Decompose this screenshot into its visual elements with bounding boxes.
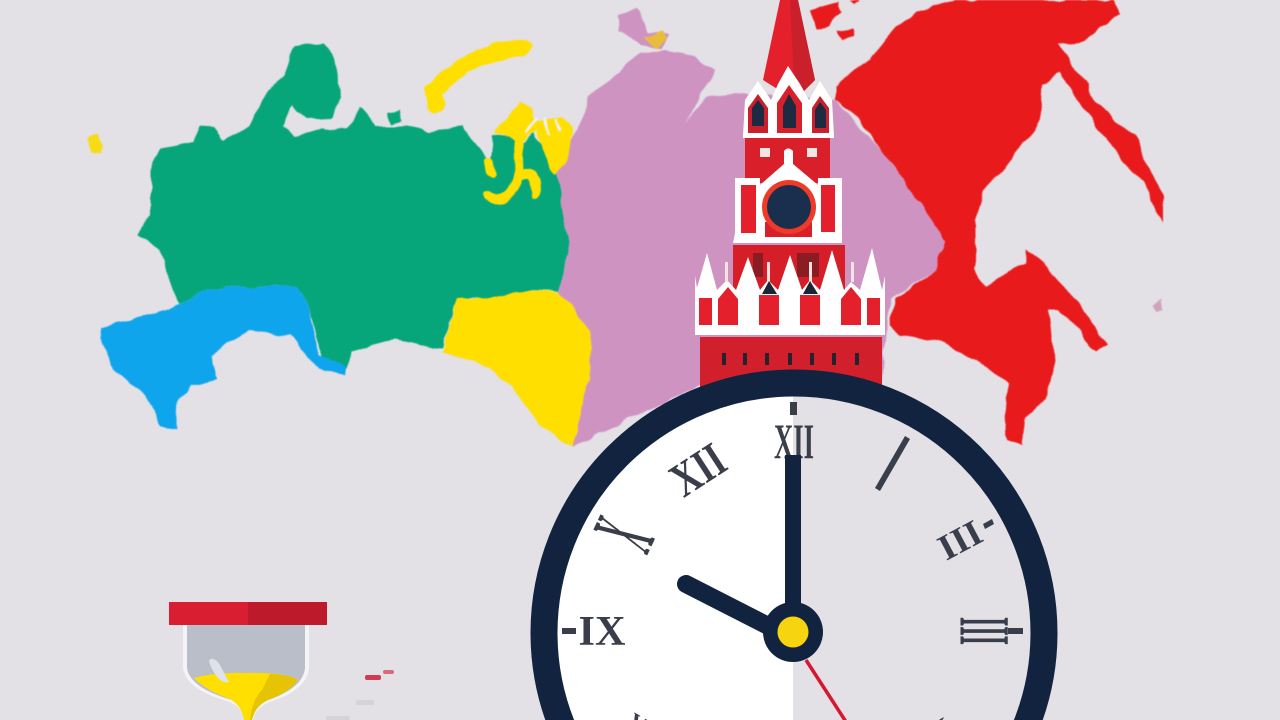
clock face base (553, 393, 1033, 720)
region: green (137, 42, 568, 375)
clock rim (544, 383, 1044, 720)
pale particle (326, 716, 350, 720)
falling particles (326, 670, 394, 720)
centre belfry opening (783, 94, 796, 128)
right panel (821, 185, 835, 232)
region: pink island (617, 9, 671, 50)
region: yellow north peninsula (495, 102, 573, 175)
map of regions (87, 0, 1162, 447)
grey particle (356, 700, 374, 705)
hour hand (686, 584, 780, 632)
region: red islands (810, 0, 860, 39)
battlement dark arches (762, 281, 818, 294)
region: far west islet (87, 135, 105, 155)
hourglass (169, 602, 327, 720)
red particle (365, 675, 381, 680)
spire shaded side (790, 0, 815, 100)
clock hub (763, 602, 823, 662)
base slits (722, 353, 859, 365)
small windows (760, 148, 817, 157)
second hand (806, 660, 850, 720)
region: yellow south (443, 290, 591, 447)
numeral ticks (562, 402, 1023, 634)
glass fill (187, 625, 305, 720)
region: green islet (388, 110, 403, 123)
belfry ledge (743, 133, 834, 138)
hourglass cap (169, 602, 327, 625)
belfry arches (743, 66, 834, 136)
upper tower body (745, 138, 830, 183)
clock face left half (553, 393, 793, 720)
region: pink (556, 50, 945, 447)
left belfry window (748, 94, 768, 133)
numeral I (875, 436, 910, 491)
kremlin tower (695, 0, 885, 387)
glass outline (183, 625, 309, 720)
clock section (733, 148, 842, 243)
sand (194, 673, 298, 720)
tower base (700, 337, 882, 387)
red plinth under tower clock (765, 222, 812, 237)
numeral III: III (945, 617, 1025, 645)
numeral IX: IX (578, 609, 626, 655)
mid tower body (733, 245, 845, 290)
numeral X: X (573, 504, 674, 564)
right belfry opening (815, 102, 826, 128)
region: white streaks (526, 118, 560, 134)
glass highlight (209, 659, 229, 682)
tower spire (763, 0, 815, 100)
right belfry window (812, 96, 829, 133)
pink particle (383, 670, 394, 674)
mid tower shadows (753, 253, 819, 277)
small pink speck (1154, 299, 1162, 312)
region: yellow spot on island (645, 31, 668, 50)
left panel (741, 185, 756, 233)
region: yellow river (488, 145, 535, 199)
region: red (835, 0, 1162, 445)
numeral XI: XII (661, 433, 736, 508)
main clock (544, 383, 1044, 720)
numeral II: III (931, 512, 989, 568)
hub centre (778, 616, 808, 648)
battlement windows (699, 287, 880, 325)
sand shadow (250, 674, 298, 720)
battlement finials (725, 262, 854, 282)
tower clock face (762, 180, 816, 234)
region: yellow north arc (433, 46, 524, 105)
region: blue (102, 285, 347, 430)
battlement wall (695, 248, 885, 335)
tower clock inner (767, 185, 811, 229)
minute hand (785, 455, 801, 635)
cap shaded side (248, 602, 327, 625)
centre belfry window (777, 85, 802, 133)
left belfry opening (752, 100, 764, 126)
numeral XII: XII (774, 413, 814, 469)
